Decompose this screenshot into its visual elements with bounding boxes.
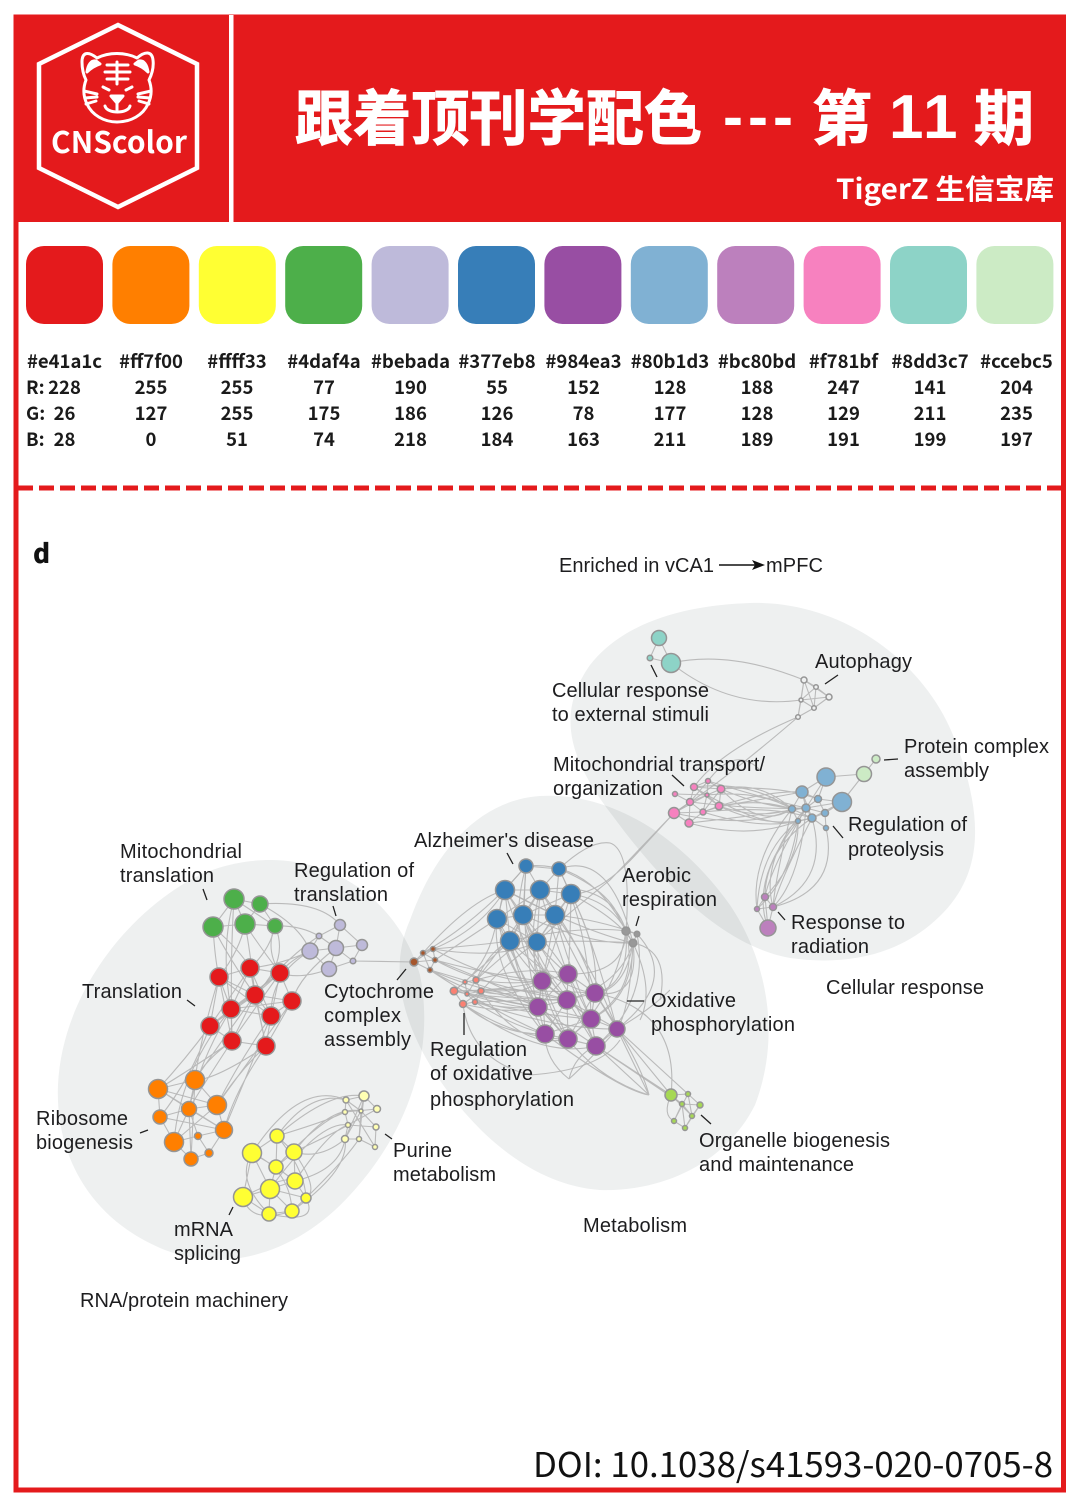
cluster: ribosome biogenesis (148, 1070, 232, 1166)
colour value table: 175 (308, 400, 340, 426)
colour value table: 197 (1000, 426, 1033, 452)
legend: enriched direction: Enriched in vCA1 (559, 555, 714, 577)
colour value table: R: (26, 374, 45, 400)
label: Mitochondrial transport/organization (553, 754, 765, 800)
label: Purine metabolism (393, 1140, 496, 1186)
legend: enriched direction: mPFC (766, 555, 823, 577)
colour value table: #f781bf (809, 348, 879, 374)
label: Mitochondrial transport/organization: organization (553, 778, 663, 800)
label: Organelle biogenesis and maintenance (699, 1130, 890, 1176)
colour value table: 77 (313, 374, 335, 400)
colour value table: 26 (54, 400, 75, 426)
colour value table: B: (26, 426, 45, 452)
legend: enriched direction (559, 555, 823, 577)
colour value table: 247 (827, 374, 860, 400)
colour value table: #4daf4a (287, 348, 361, 374)
label: Regulation of oxidative phosphorylation: phosphorylation (430, 1089, 574, 1111)
colour value table: 184 (481, 426, 513, 452)
cluster: translation (201, 959, 301, 1055)
cluster: regulation of translation (302, 920, 368, 976)
label: Purine metabolism: Purine (393, 1140, 452, 1162)
title: 11 (889, 83, 961, 152)
colour value table: 211 (914, 400, 946, 426)
cluster backgrounds (58, 603, 975, 1260)
label: Cytochrome complex assembly: complex (324, 1005, 401, 1027)
title: 第 (812, 71, 872, 158)
background: metabolism (400, 796, 769, 1190)
logo: CNScolor tiger: CNScolor (51, 118, 188, 162)
label: mRNA splicing: splicing (174, 1243, 241, 1265)
label: Cellular response to external stimuli (552, 680, 709, 726)
label: Cytochrome complex assembly: Cytochrome (324, 981, 434, 1003)
colour value table: 177 (654, 400, 686, 426)
colour value table: 190 (394, 374, 427, 400)
label: Cellular response: Cellular response (826, 977, 984, 999)
title: --- (723, 83, 798, 150)
label: Protein complex assembly: assembly (904, 760, 989, 782)
cluster: purine metabolism (342, 1091, 380, 1150)
label: Regulation of translation: translation (294, 884, 388, 906)
label: Ribosome biogenesis: Ribosome (36, 1108, 128, 1130)
cluster: mitochondrial transport (668, 778, 725, 827)
colour value table: 235 (1000, 400, 1033, 426)
label: Oxidative phosphorylation: Oxidative (651, 990, 736, 1012)
label: Ribosome biogenesis (36, 1108, 133, 1154)
label: Aerobic respiration (622, 865, 717, 911)
label: Mitochondrial translation: translation (120, 865, 214, 887)
label: Cellular response to external stimuli: Cellular response (552, 680, 709, 702)
colour value table: 126 (481, 400, 513, 426)
colour value table: 127 (135, 400, 167, 426)
label: Organelle biogenesis and maintenance: Organelle biogenesis (699, 1130, 890, 1152)
cluster: autophagy (796, 677, 832, 719)
colour value table: 189 (741, 426, 773, 452)
label: Aerobic respiration: respiration (622, 889, 717, 911)
colour value table: 255 (221, 374, 253, 400)
background: cellular response (570, 603, 975, 960)
colour value table: #ccebc5 (980, 348, 1053, 374)
colour value table: 255 (135, 374, 167, 400)
network edges (158, 638, 876, 1217)
label: Ribosome biogenesis: biogenesis (36, 1132, 133, 1154)
colour value table: #ff7f00 (119, 348, 183, 374)
cluster: protein complex assembly (856, 755, 880, 782)
colour value table: #bc80bd (718, 348, 796, 374)
label: Response to radiation: radiation (791, 936, 869, 958)
cluster: response to radiation (754, 894, 776, 936)
label: Autophagy: Autophagy (815, 651, 912, 673)
logo: CNScolor tiger (39, 25, 197, 207)
colour value table: 74 (313, 426, 335, 452)
colour value table: 78 (573, 400, 594, 426)
label: Aerobic respiration: Aerobic (622, 865, 691, 887)
colour value table: 186 (394, 400, 427, 426)
cluster: organelle biogenesis and maintenance (665, 1089, 703, 1130)
label: Purine metabolism: metabolism (393, 1164, 496, 1186)
colour value table: 204 (1000, 374, 1033, 400)
colour value table: 28 (54, 426, 75, 452)
panel label d: d (33, 534, 50, 571)
label: Response to radiation: Response to (791, 912, 905, 934)
label: Cellular response to external stimuli: to external stimuli (552, 704, 709, 726)
label: Metabolism: Metabolism (583, 1215, 687, 1237)
colour value table: 141 (914, 374, 946, 400)
cluster: oxidative phosphorylation (529, 965, 625, 1055)
colour value table: #bebada (371, 348, 450, 374)
colour value table (26, 348, 1053, 452)
label: RNA/protein machinery: RNA/protein machinery (80, 1290, 288, 1312)
cluster: cellular response to external stimuli (647, 630, 680, 672)
colour value table: 163 (567, 426, 600, 452)
cluster: mRNA splicing (234, 1129, 311, 1221)
label: Regulation of translation (294, 860, 414, 906)
label: Protein complex assembly: Protein complex (904, 736, 1049, 758)
colour value table: #984ea3 (546, 348, 622, 374)
cluster: regulation of proteolysis (788, 768, 852, 830)
colour value table: #e41a1c (27, 348, 102, 374)
label: Mitochondrial translation: Mitochondrial (120, 841, 242, 863)
label: Regulation of translation: Regulation of (294, 860, 414, 882)
colour value table: 228 (48, 374, 81, 400)
label: Regulation of oxidative phosphorylation: Regulation (430, 1039, 527, 1061)
label: Cytochrome complex assembly: assembly (324, 1029, 411, 1051)
colour value table: 129 (827, 400, 860, 426)
label: mRNA splicing (174, 1219, 241, 1265)
colour value table: #8dd3c7 (891, 348, 969, 374)
leader lines (140, 665, 898, 1215)
label: Cytochrome complex assembly (324, 981, 434, 1051)
colour value table: 255 (221, 400, 253, 426)
colour value table: #ffff33 (207, 348, 267, 374)
label: mRNA splicing: mRNA (174, 1219, 234, 1241)
colour value table: G: (26, 400, 45, 426)
colour value table: 152 (567, 374, 600, 400)
label: Regulation of oxidative phosphorylation (430, 1039, 574, 1111)
colour value table: 128 (654, 374, 686, 400)
background: RNA/protein machinery (58, 860, 424, 1260)
colour value table: #377eb8 (458, 348, 536, 374)
label: Mitochondrial translation (120, 841, 242, 887)
cluster: regulation of oxidative phosphorylation (450, 977, 484, 1008)
labels (36, 651, 1049, 1312)
title (295, 71, 1034, 158)
title: 跟着顶刊学配色 (295, 71, 702, 158)
colour value table: 55 (486, 374, 508, 400)
colour value table: 188 (741, 374, 773, 400)
colour value table: 51 (226, 426, 248, 452)
colour value table: 211 (654, 426, 686, 452)
network nodes (148, 630, 880, 1221)
cluster: aerobic respiration (622, 927, 640, 947)
title: 期 (974, 71, 1034, 158)
colour value table: 199 (914, 426, 946, 452)
label: Translation: Translation (82, 981, 182, 1003)
subtitle: TigerZ 生信宝库 (836, 168, 1054, 208)
colour swatches (26, 246, 1053, 324)
label: Regulation of oxidative phosphorylation: of oxidative (430, 1063, 533, 1085)
colour value table: 218 (394, 426, 427, 452)
colour value table: 191 (827, 426, 860, 452)
colour value table: 128 (741, 400, 773, 426)
colour value table: #80b1d3 (631, 348, 709, 374)
label: Regulation of proteolysis (848, 814, 967, 861)
cluster: cytochrome complex assembly (410, 946, 438, 972)
label: Organelle biogenesis and maintenance: and maintenance (699, 1154, 854, 1176)
header band (14, 15, 1066, 222)
label: Oxidative phosphorylation (651, 990, 795, 1036)
label: Response to radiation (791, 912, 905, 958)
colour value table: 0 (146, 426, 157, 452)
cluster: Alzheimer's disease (488, 859, 580, 951)
label: Alzheimer's disease: Alzheimer's disease (414, 830, 594, 852)
label: Mitochondrial transport/organization: Mitochondrial transport/ (553, 754, 765, 776)
label: Regulation of proteolysis: Regulation of (848, 814, 967, 836)
label: Oxidative phosphorylation: phosphorylation (651, 1014, 795, 1036)
label: Protein complex assembly (904, 736, 1049, 782)
cluster: mitochondrial translation (203, 889, 282, 937)
label: Regulation of proteolysis: proteolysis (848, 839, 944, 861)
DOI: DOI: 10.1038/s41593-020-0705-8 (533, 1438, 1053, 1487)
